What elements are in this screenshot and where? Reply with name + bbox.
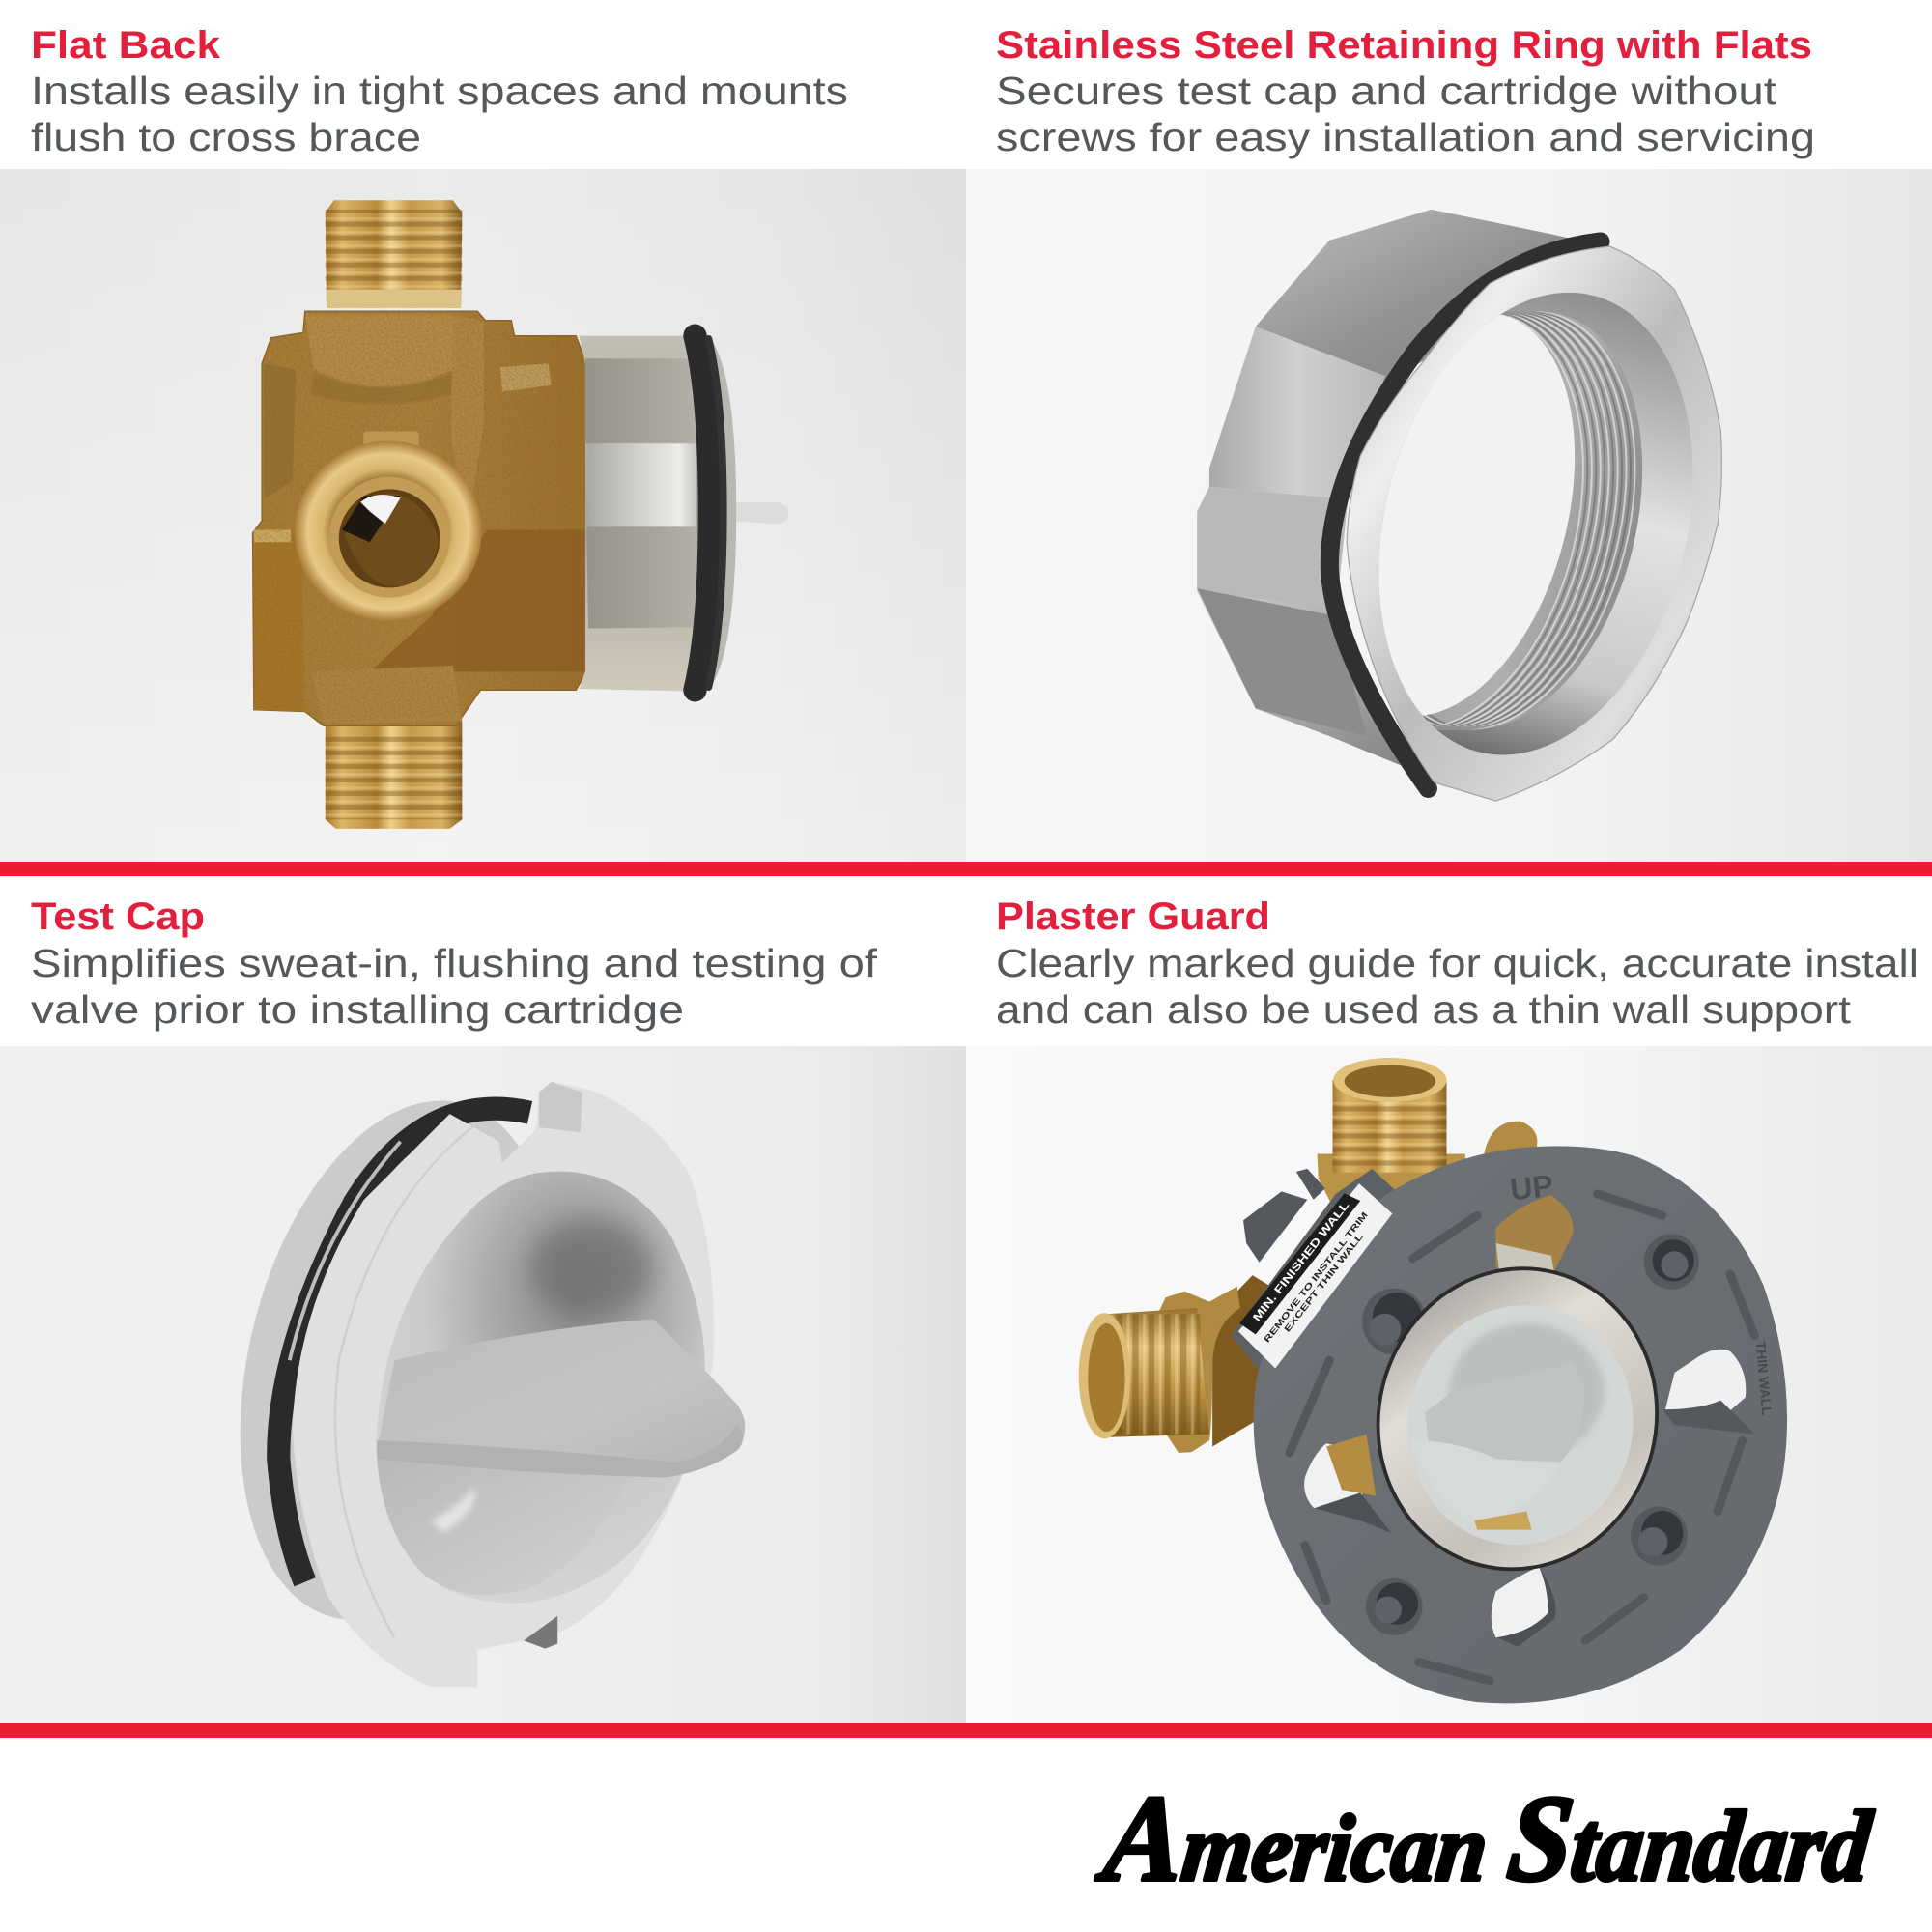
- description: Test Cap line 2: valve prior to installing cartridge: [31, 987, 684, 1032]
- upper shoulder shading: [305, 314, 453, 388]
- panel: plaster guard: [966, 895, 1932, 1724]
- panel: test cap: [0, 895, 966, 1724]
- cast body: [252, 311, 586, 725]
- image background: test cap: [0, 1046, 966, 1724]
- product: plaster guard assembly: [1079, 1058, 1787, 1703]
- steel retainer: [580, 336, 699, 692]
- back disc: [708, 336, 736, 690]
- tab: [730, 502, 788, 524]
- grey label mount: [1231, 1169, 1406, 1381]
- panel: flat back: [0, 24, 966, 862]
- white label: EXCEPT THIN WALL: [1282, 1231, 1365, 1334]
- description: Plaster Guard line 2: and can also be used as a thin wall support: [996, 987, 1852, 1032]
- description: ring line 2: screws for easy installation and servicing: [996, 115, 1815, 159]
- left nipple: [1079, 1308, 1209, 1438]
- image background: plaster guard: [966, 1046, 1932, 1724]
- white label: [1238, 1183, 1392, 1368]
- o-ring highlight: [290, 1142, 401, 1360]
- top tab: [539, 1082, 582, 1132]
- bottom thread: [326, 721, 462, 829]
- red divider: lower: [0, 1723, 1932, 1738]
- product: brass valve body: [252, 200, 788, 829]
- handle: [377, 1319, 745, 1477]
- disc rim line: [335, 1123, 477, 1637]
- description: Flat Back line 2: flush to cross brace: [31, 115, 421, 159]
- back dome: [190, 1067, 605, 1653]
- plate marks: [1290, 1194, 1754, 1681]
- white label: MIN. FINISHED WALL: [1251, 1200, 1351, 1323]
- plate cutouts: [1304, 1195, 1754, 1647]
- red divider: upper: [0, 862, 1932, 876]
- image background: ring: [966, 169, 1932, 862]
- cap handle: [1425, 1363, 1585, 1462]
- left brass body: [1212, 1275, 1318, 1446]
- description: Plaster Guard line 1: Clearly marked guide for quick, accurate install: [996, 941, 1918, 985]
- product: test cap: [190, 1067, 745, 1687]
- hole interiors: [1373, 1239, 1694, 1625]
- logo: American Standard: [1092, 1770, 1880, 1907]
- o-ring: [278, 1109, 530, 1582]
- o-ring: [695, 336, 710, 690]
- bottom notch: [524, 1616, 557, 1649]
- description: Flat Back line 1: Installs easily in tight spaces and mounts: [31, 69, 848, 113]
- image background: flat back: [0, 169, 966, 862]
- panel: stainless steel retaining ring: [966, 24, 1932, 862]
- marking: UP: UP: [1508, 1168, 1555, 1207]
- description: Test Cap line 1: Simplifies sweat-in, flushing and testing of: [31, 941, 878, 985]
- cap recess: [1450, 1323, 1604, 1459]
- plate holes: [1362, 1234, 1699, 1635]
- front disc: [293, 1082, 714, 1687]
- nickel ring: [1347, 1238, 1689, 1599]
- description: ring line 1: Secures test cap and cartridge without: [996, 69, 1777, 113]
- rear brass lug: [1484, 1122, 1557, 1237]
- body casting texture: [252, 311, 586, 725]
- front face: [1347, 246, 1721, 801]
- top thread: [326, 200, 462, 308]
- white label: REMOVE TO INSTALL TRIM: [1262, 1210, 1370, 1345]
- brass glint: [1474, 1511, 1532, 1530]
- marking: THIN WALL: THIN WALL: [1753, 1341, 1775, 1416]
- product: retaining ring: [1197, 210, 1740, 801]
- center port: [295, 431, 482, 621]
- recess lower: [377, 1459, 629, 1595]
- recess shadow: [530, 1218, 653, 1318]
- cap interior: [1382, 1281, 1659, 1569]
- recess: [376, 1172, 705, 1603]
- left flange: [1159, 1287, 1240, 1453]
- bore: [1378, 292, 1692, 755]
- grey plug and peg: [1243, 1169, 1325, 1263]
- heading: Stainless Steel Retaining Ring with Flats: Stainless Steel Retaining Ring with Flats: [996, 24, 1812, 67]
- logo: American Standard: American: [1092, 1770, 1495, 1907]
- hole threads: [1369, 1251, 1689, 1624]
- heading: Flat Back: Flat Back: [31, 24, 221, 67]
- logo: American Standard: Standard: [1502, 1770, 1880, 1907]
- heading: Test Cap: Test Cap: [31, 895, 205, 938]
- hex body facets: [1197, 210, 1606, 801]
- o-ring: [1329, 242, 1601, 788]
- plate: [1254, 1146, 1787, 1703]
- top nipple: [1318, 1058, 1468, 1212]
- heading: Plaster Guard: Plaster Guard: [996, 895, 1270, 938]
